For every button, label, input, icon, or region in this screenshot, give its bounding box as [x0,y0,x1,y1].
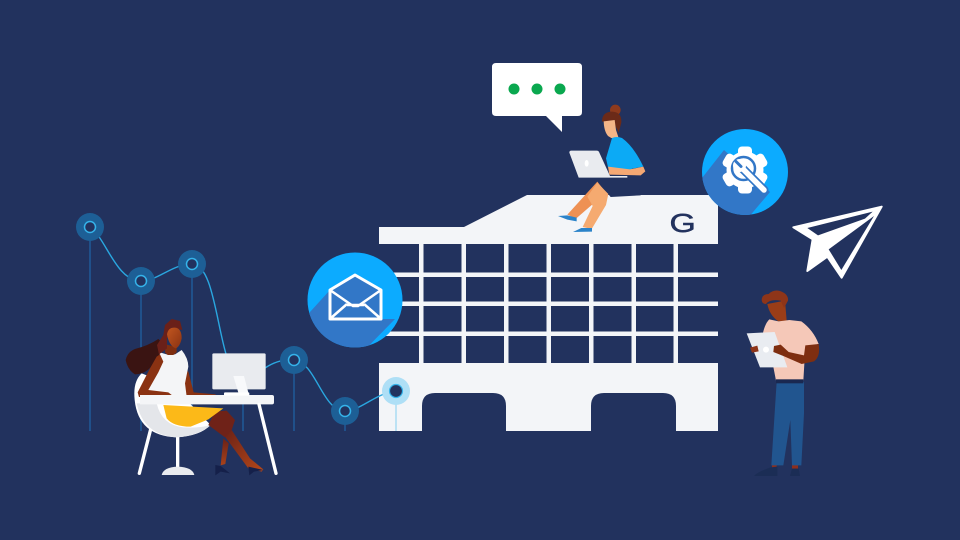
shirt [761,319,819,381]
navy skirt [597,176,641,197]
person: woman with laptop on roof [558,105,645,232]
chair [134,373,211,437]
shoes [558,215,577,221]
face [167,328,182,348]
hair [762,291,788,308]
arm [608,167,645,175]
long hair [126,339,167,374]
building [379,195,718,431]
blue top [606,137,643,172]
icon: gear and wrench badge [702,129,788,218]
desk [140,353,276,473]
chart drop lines [90,230,345,431]
far arm [184,370,216,399]
icon: paper plane [793,207,882,278]
face [604,120,619,138]
icon: speech bubble [492,63,582,132]
shoes [754,467,777,476]
front leg [583,183,608,229]
laptop [569,151,627,178]
chart nodes [76,213,410,431]
near arm [138,354,174,397]
chair legs [139,429,178,473]
icon: envelope badge [308,252,402,348]
person: woman at desk, crossed legs [208,411,263,475]
tablet [747,332,787,367]
arm and hands [773,344,819,364]
hair cap [157,319,182,354]
neck and head [767,301,787,321]
chart curve [90,227,396,411]
building logo letter: G [670,210,696,238]
shoes [215,465,230,475]
monitor [212,353,266,389]
ankles [772,463,777,468]
dress [141,350,188,397]
person: woman at desk, chair, legs [134,373,211,475]
illustration [76,63,883,476]
person: woman at desk, upper body [126,319,216,399]
neck [165,344,177,355]
person: woman at desk, skirt [163,405,223,427]
person: man with tablet [747,291,819,476]
hair [610,105,621,115]
pants [771,382,804,465]
back leg [567,182,606,219]
